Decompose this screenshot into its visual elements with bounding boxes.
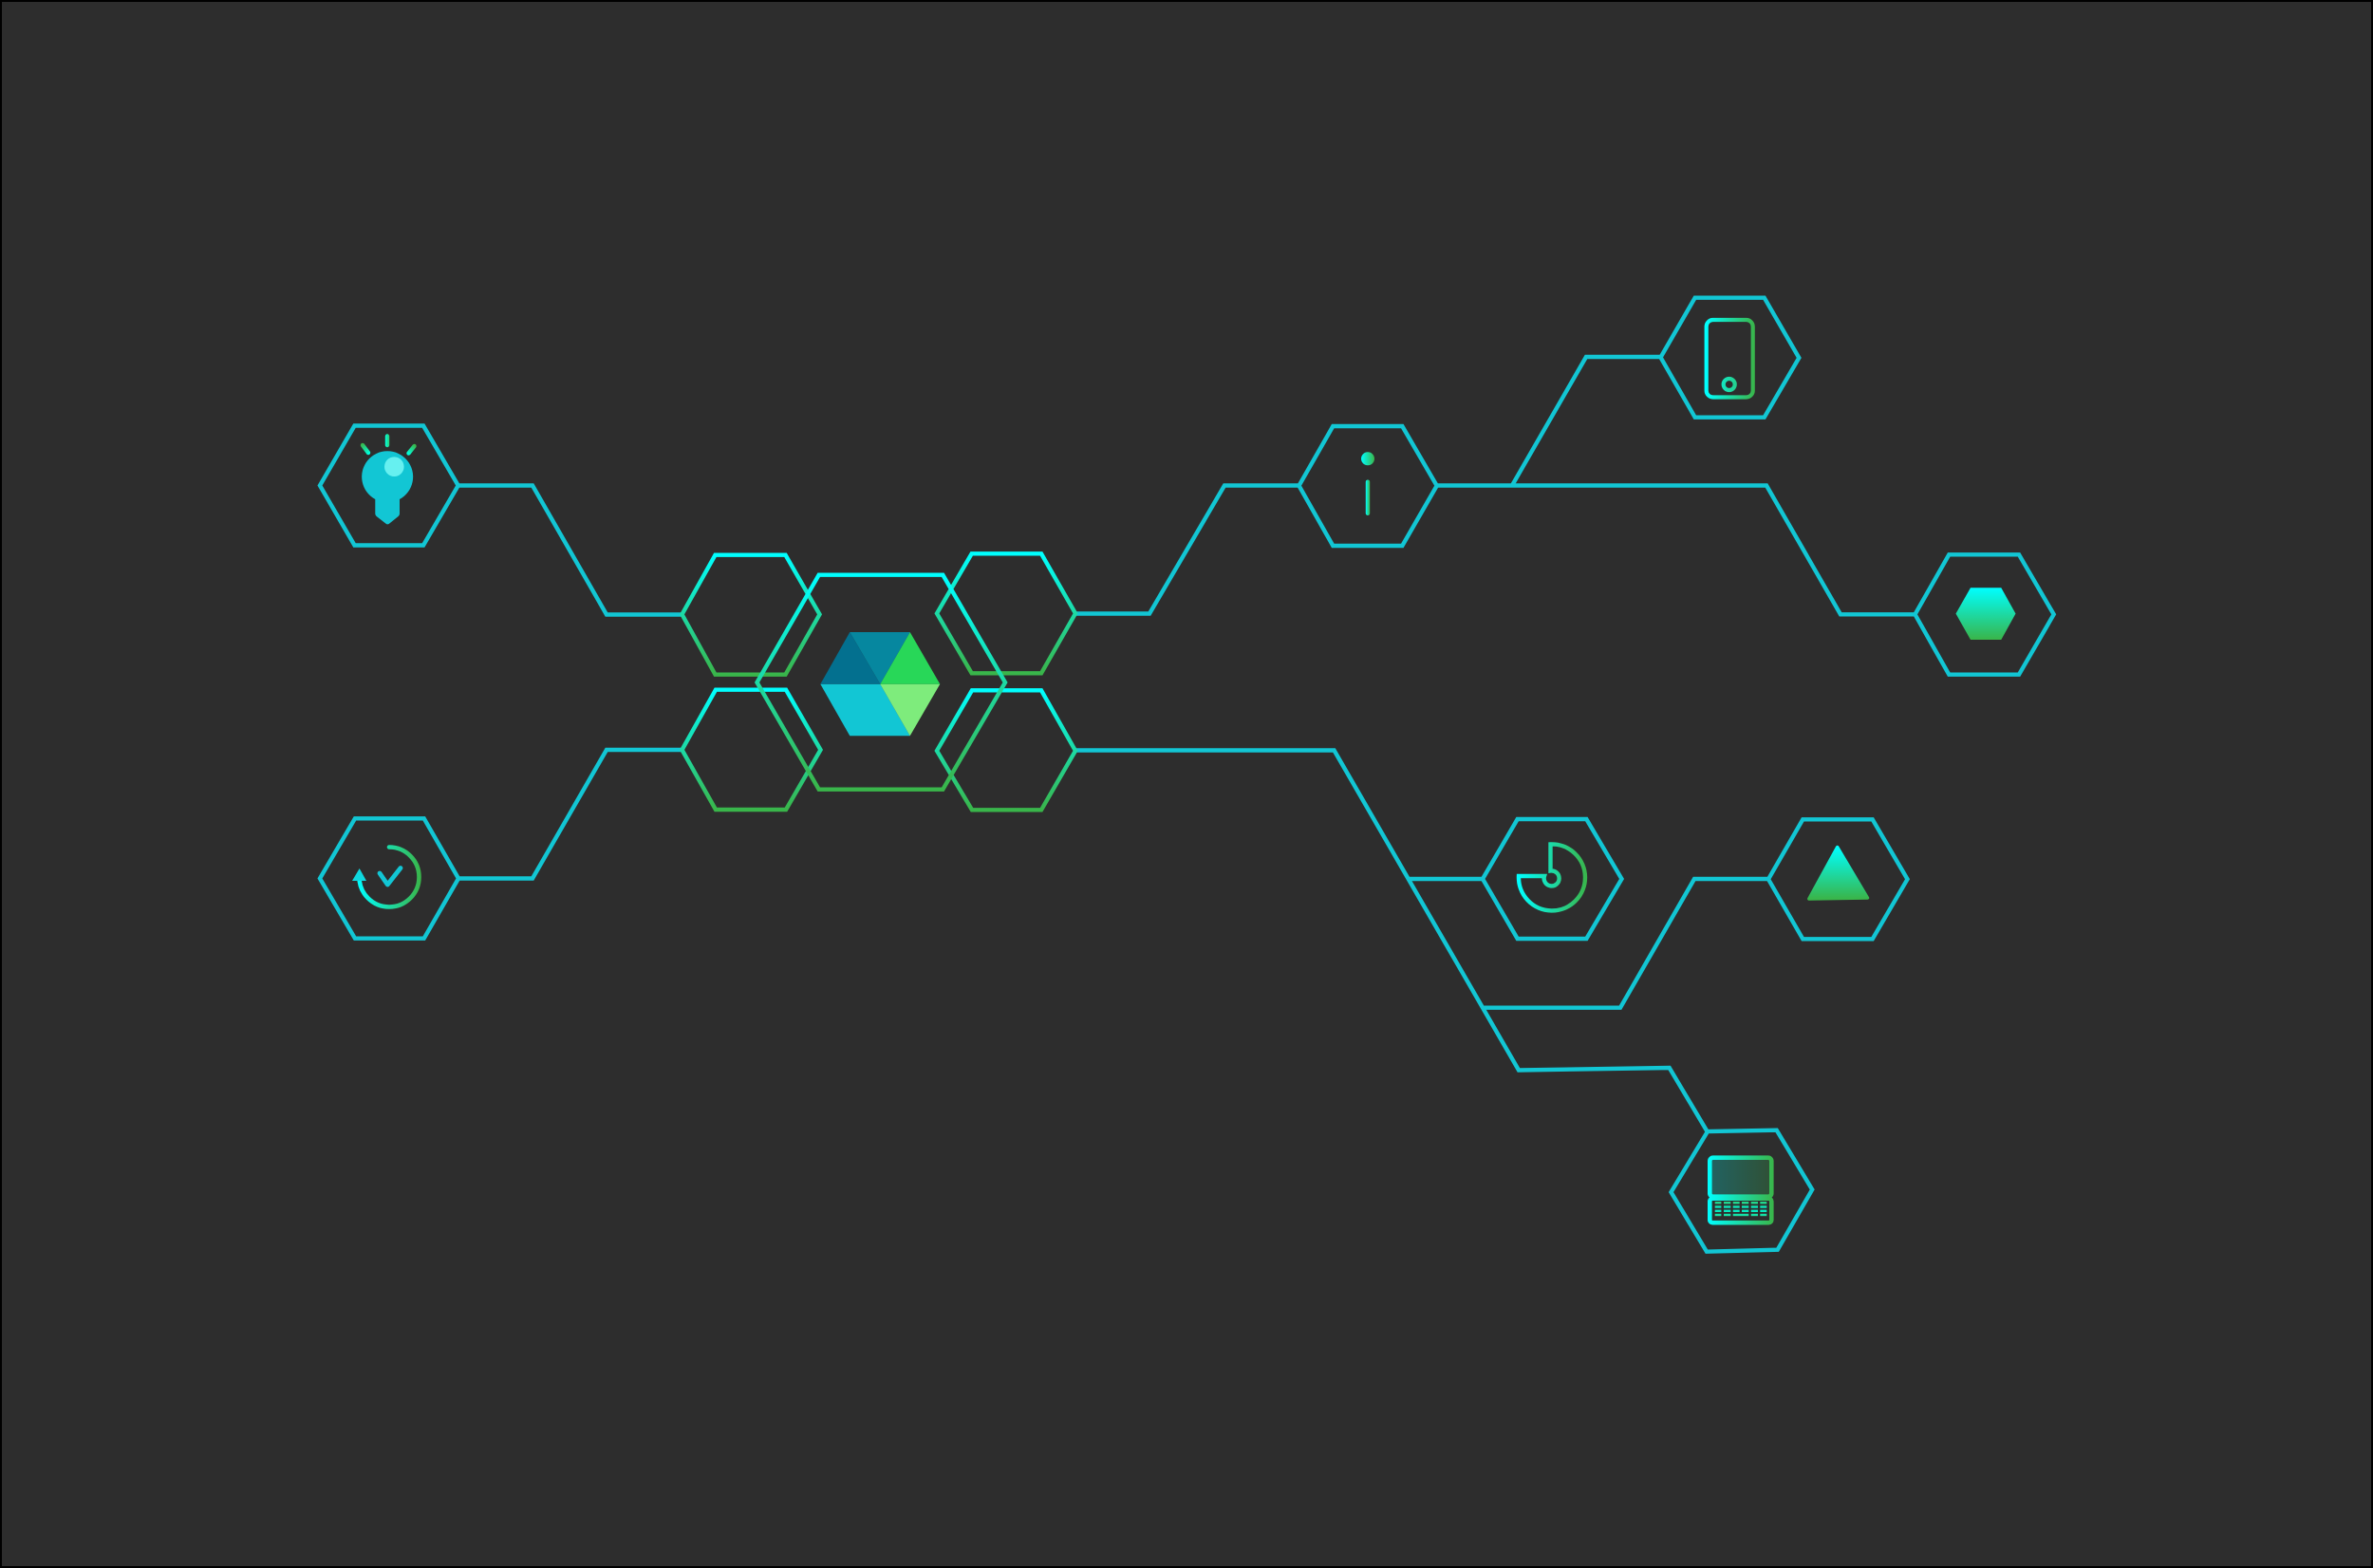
node hexagon [1299,426,1437,546]
hub hexagon bottom left [682,690,820,810]
hub: central hexagon cluster [682,553,1075,810]
icon: solid triangle [1809,847,1868,899]
node hexagon [1661,298,1799,418]
node hexagon [320,425,458,545]
node: info [1299,426,1437,546]
node hexagon [320,818,458,939]
node: phone [1661,298,1799,418]
node: idea [320,425,458,545]
hub hexagon bottom right [937,690,1075,810]
icon: phone [1707,320,1753,397]
icon: refresh with check mark [352,847,420,907]
connector: idea node to hub [458,486,682,615]
node: triangle [1768,819,1908,939]
node hexagon [1483,819,1621,939]
node: process [320,818,458,939]
connector: branch to phone node [1512,357,1661,486]
connector: branch to chart node [1410,877,1483,881]
node hexagon [1915,554,2054,675]
hub hexagon top left [682,555,820,675]
connector: branch to triangle node [1485,879,1768,1008]
hub large centre hexagon [757,575,1005,790]
icon: laptop with keyboard [1710,1158,1771,1223]
connector: info node to hexagon node [1437,486,1915,614]
icon: information mark [1361,452,1374,515]
icon: solid hexagon [1955,588,2016,640]
connector: hub to info node [1075,486,1299,613]
icon: light bulb [362,437,414,524]
node hexagon [1671,1130,1812,1252]
node: chart [1483,819,1621,939]
hub hexagon top right [937,553,1075,673]
node: laptop [1671,1130,1812,1252]
logo: faceted hexagon [820,632,940,736]
icon: pie chart [1519,844,1585,910]
node: hexagon [1915,554,2054,675]
connector: process node to hub [459,750,682,879]
connector: hub to laptop node [1075,750,1707,1131]
node hexagon [1768,819,1908,939]
